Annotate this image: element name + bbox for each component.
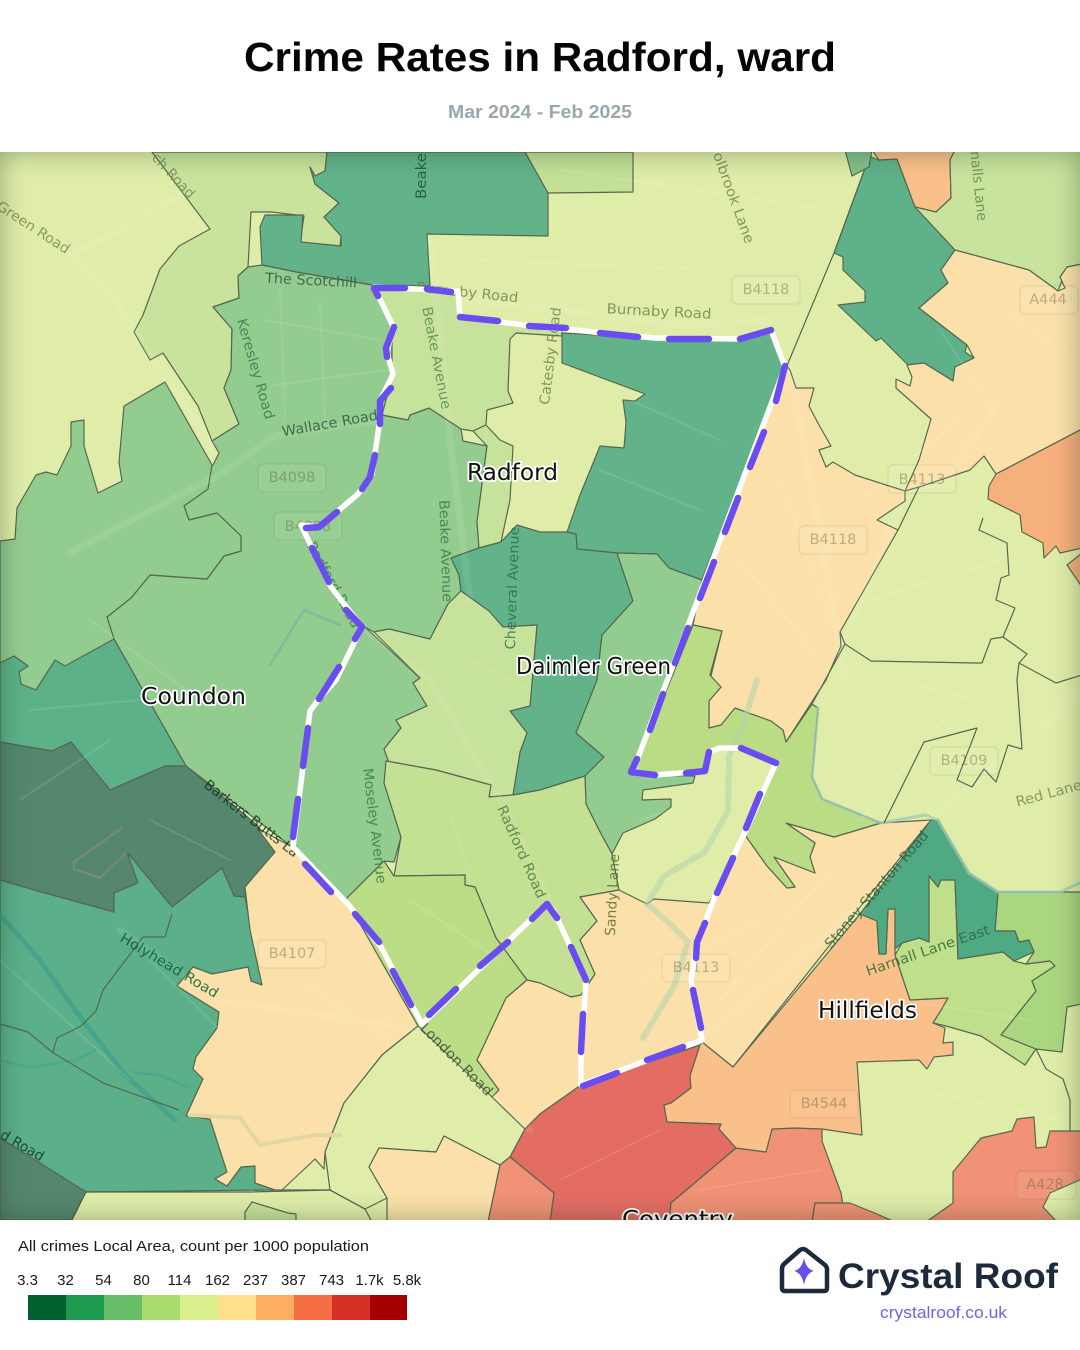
region: peach inside ward bbox=[477, 820, 931, 1129]
region: Beake Avenue light green bbox=[372, 285, 562, 431]
map: choropleth of crime rates bbox=[0, 152, 1080, 1220]
label: London Road: London Road bbox=[416, 1020, 496, 1100]
region: Harnall light green bbox=[895, 876, 1055, 1065]
river: south-west canal bbox=[0, 915, 175, 1120]
shield: B4098 upper bbox=[258, 464, 326, 492]
river: east loop bbox=[812, 708, 1080, 892]
region: top orange bbox=[872, 150, 955, 212]
region: London Road yellow bbox=[325, 1026, 525, 1209]
region: north-of-Radford-Road light green bbox=[374, 591, 537, 797]
legend tick labels: 114 bbox=[168, 1272, 191, 1289]
region: west dark green bbox=[0, 639, 186, 790]
region: top dark green bbox=[260, 152, 548, 286]
boundary: south-west dark subdivisions bbox=[0, 1024, 179, 1110]
place names bbox=[141, 460, 917, 1233]
boundary: bottom right bbox=[1036, 1049, 1070, 1131]
region: far east green bbox=[995, 892, 1080, 1052]
region: city centre red bbox=[510, 1045, 736, 1222]
boundary: right column bbox=[1019, 663, 1080, 683]
stream: Coundon park bbox=[270, 610, 340, 665]
shield: B4118 south bbox=[799, 526, 867, 554]
region: south peach small bbox=[369, 1136, 500, 1222]
extra ward and boundary lines bbox=[0, 171, 1080, 1209]
label: Catesby Road: Catesby Road bbox=[537, 306, 565, 406]
label: Beake Avenue north: Beake Avenue bbox=[418, 305, 454, 411]
region: B4107 peach bbox=[177, 828, 418, 1190]
region: bottom-left darkest bbox=[0, 1138, 86, 1220]
boundary: east yellow zones bbox=[884, 518, 1027, 823]
region: small orange edge bbox=[1067, 553, 1080, 587]
label: The Scotchill: The Scotchill bbox=[264, 271, 357, 291]
legend tick labels: 32 bbox=[57, 1272, 74, 1289]
region: bottom-left light strip bbox=[71, 1190, 372, 1222]
region: Hillfields orange bbox=[664, 909, 953, 1152]
region: east deeper orange bbox=[988, 429, 1080, 558]
choropleth regions bbox=[0, 150, 1080, 1222]
water and parks bbox=[0, 610, 1080, 1145]
map edge vignette bbox=[0, 152, 1080, 1220]
road labels bbox=[0, 150, 1080, 1165]
region: top light patch bbox=[525, 152, 633, 193]
legend tick labels bbox=[17, 1272, 422, 1289]
icon: house with star bbox=[782, 1249, 827, 1291]
legend colour scale bbox=[28, 1295, 407, 1320]
region: south-west dark green bbox=[0, 852, 275, 1192]
place: Radford: Radford bbox=[467, 460, 558, 486]
region: salmon far bottom bbox=[812, 1203, 895, 1222]
roads: major bbox=[60, 195, 1080, 1130]
boundary: bottom strip bbox=[86, 1190, 365, 1209]
region: west mid green bbox=[0, 382, 241, 700]
place: Coundon: Coundon bbox=[141, 684, 246, 710]
label: Keresley Road: Keresley Road bbox=[233, 317, 277, 421]
shield: B4113 south: B4113 bbox=[673, 960, 719, 976]
shield: B4109: B4109 bbox=[941, 753, 987, 769]
legend tick labels: 1.7k bbox=[355, 1272, 384, 1289]
stream: lower branch bbox=[132, 1072, 190, 1088]
road network bbox=[0, 170, 1080, 1190]
region: Daimler east mid green bbox=[576, 553, 702, 854]
legend tick labels: 743 bbox=[319, 1272, 344, 1289]
label: Cheveral Avenue: Cheveral Avenue bbox=[503, 526, 523, 650]
region: Harnall dark green bbox=[860, 820, 1034, 961]
stream: south-west branch bbox=[0, 1050, 95, 1068]
shield: A428 bbox=[1016, 1171, 1076, 1199]
wordmark: Crystal Roof bbox=[838, 1257, 1058, 1296]
legend title: All crimes Local Area, count per 1000 population bbox=[18, 1238, 369, 1255]
label: Burnaby Road west: Burnaby Road bbox=[415, 280, 519, 306]
label: Burnaby Road east: Burnaby Road bbox=[606, 301, 712, 323]
region: Daimler Green dark green bbox=[451, 525, 633, 795]
legend tick labels: 54 bbox=[95, 1272, 112, 1289]
label: Beake Avenue south: Beake Avenue bbox=[435, 500, 455, 602]
boundary: east street blocks bbox=[845, 637, 1003, 663]
river: Sherbourne in ward bbox=[643, 680, 757, 1038]
ward boundary: Radford bbox=[293, 287, 785, 1086]
shield: A428: A428 bbox=[1026, 1177, 1064, 1193]
region: top small green bbox=[845, 150, 872, 176]
website: crystalroof.co.uk bbox=[880, 1304, 1008, 1322]
place: Hillfields: Hillfields bbox=[818, 998, 917, 1024]
subtitle: date range: Mar 2024 - Feb 2025 bbox=[448, 102, 632, 122]
region: east peach bbox=[896, 250, 1080, 491]
region: salmon east bbox=[926, 1117, 1080, 1222]
shield: B4113 south bbox=[662, 954, 730, 982]
region: top-east dark green bbox=[834, 157, 974, 381]
region: B4118 peach bbox=[693, 365, 905, 742]
region: salmon left bbox=[488, 1157, 554, 1222]
region: Keresley mid green bbox=[107, 265, 487, 899]
region: darkest green Barkers Butts bbox=[0, 742, 275, 912]
label: Beake top: Beake bbox=[414, 153, 430, 199]
shield: A444 bbox=[1020, 286, 1078, 314]
shield: B4113 north: B4113 bbox=[899, 472, 945, 488]
boundary: south-west dark subdivision north bbox=[53, 914, 172, 1052]
ward outline white bbox=[293, 287, 785, 1085]
shield: B4118 north bbox=[732, 276, 800, 304]
title: Crime Rates in Radford, ward bbox=[244, 34, 836, 80]
legend tick labels: 387 bbox=[281, 1272, 306, 1289]
label: Moseley Avenue: Moseley Avenue bbox=[359, 767, 389, 885]
logo: Crystal Roof bbox=[780, 1246, 1058, 1322]
label: Holyhead Road: Holyhead Road bbox=[117, 930, 221, 1002]
boundary: top-right of yellow zone bbox=[812, 632, 845, 704]
region: top-right light green bbox=[915, 150, 1080, 291]
legend tick labels: 162 bbox=[205, 1272, 230, 1289]
stream: south peach bbox=[190, 1115, 340, 1145]
label: Barkers Butts Lane: Barkers Butts La bbox=[200, 777, 302, 861]
shield: B4098 lower bbox=[274, 512, 342, 540]
region: sliver light green bbox=[473, 425, 513, 548]
label: Sandy Lane: Sandy Lane bbox=[603, 854, 623, 936]
shield: B4098 lower: B4098 bbox=[285, 519, 331, 535]
ward outline purple dashes bbox=[293, 288, 785, 1086]
shield: B4107: B4107 bbox=[269, 946, 315, 962]
label: Radford Road upper: Radford Road bbox=[303, 539, 363, 631]
region: Radford Road light green bbox=[384, 761, 619, 997]
legend bbox=[17, 1238, 422, 1320]
map base: light yellow-green bbox=[0, 152, 1080, 1220]
shield: B4107 bbox=[258, 940, 326, 968]
shield: B4118 south: B4118 bbox=[810, 532, 856, 548]
legend tick labels: 80 bbox=[133, 1272, 150, 1289]
region: ward east light green bbox=[632, 625, 881, 888]
place: Daimler Green: Daimler Green bbox=[516, 654, 671, 680]
shield: B4118 north: B4118 bbox=[743, 282, 789, 298]
title bbox=[244, 34, 836, 122]
region: Radford east dark green bbox=[562, 331, 786, 580]
label: Holbrook Lane: olbrook Lane bbox=[709, 152, 757, 246]
label: Stoney Stanton Road: Stoney Stanton Road bbox=[822, 828, 932, 952]
shield: B4544: B4544 bbox=[801, 1096, 847, 1112]
legend tick labels: 237 bbox=[243, 1272, 268, 1289]
label: Red Lane: Red Lane bbox=[1014, 777, 1080, 811]
label: Radford Road lower: Radford Road bbox=[493, 803, 549, 901]
region: salmon south bbox=[669, 1128, 843, 1222]
label: Halls Lane: nalls Lane bbox=[966, 152, 990, 222]
legend tick labels: 5.8k bbox=[393, 1272, 422, 1289]
label: Harnall Lane East: Harnall Lane East bbox=[864, 922, 993, 980]
shield: B4109 bbox=[930, 747, 998, 775]
legend tick labels: 3.3 bbox=[17, 1272, 38, 1289]
boundary: B4113 diagonal bbox=[898, 487, 919, 530]
boundary: darkest internal bbox=[74, 828, 127, 878]
region: bottom strip green patch bbox=[245, 1202, 296, 1222]
roads: minor bbox=[0, 170, 1080, 1190]
region: south-west of ward light green bbox=[346, 861, 527, 1097]
shield: B4098 upper: B4098 bbox=[269, 470, 315, 486]
label: Wallace Road: Wallace Road bbox=[281, 408, 379, 440]
road number shields bbox=[258, 276, 1078, 1199]
shield: B4113 north bbox=[888, 465, 956, 493]
shield: B4544 bbox=[790, 1090, 858, 1118]
region: north-west light green bbox=[134, 152, 341, 441]
shield: A444: A444 bbox=[1029, 292, 1067, 308]
boundary: straight diagonal north-east bbox=[786, 171, 864, 368]
